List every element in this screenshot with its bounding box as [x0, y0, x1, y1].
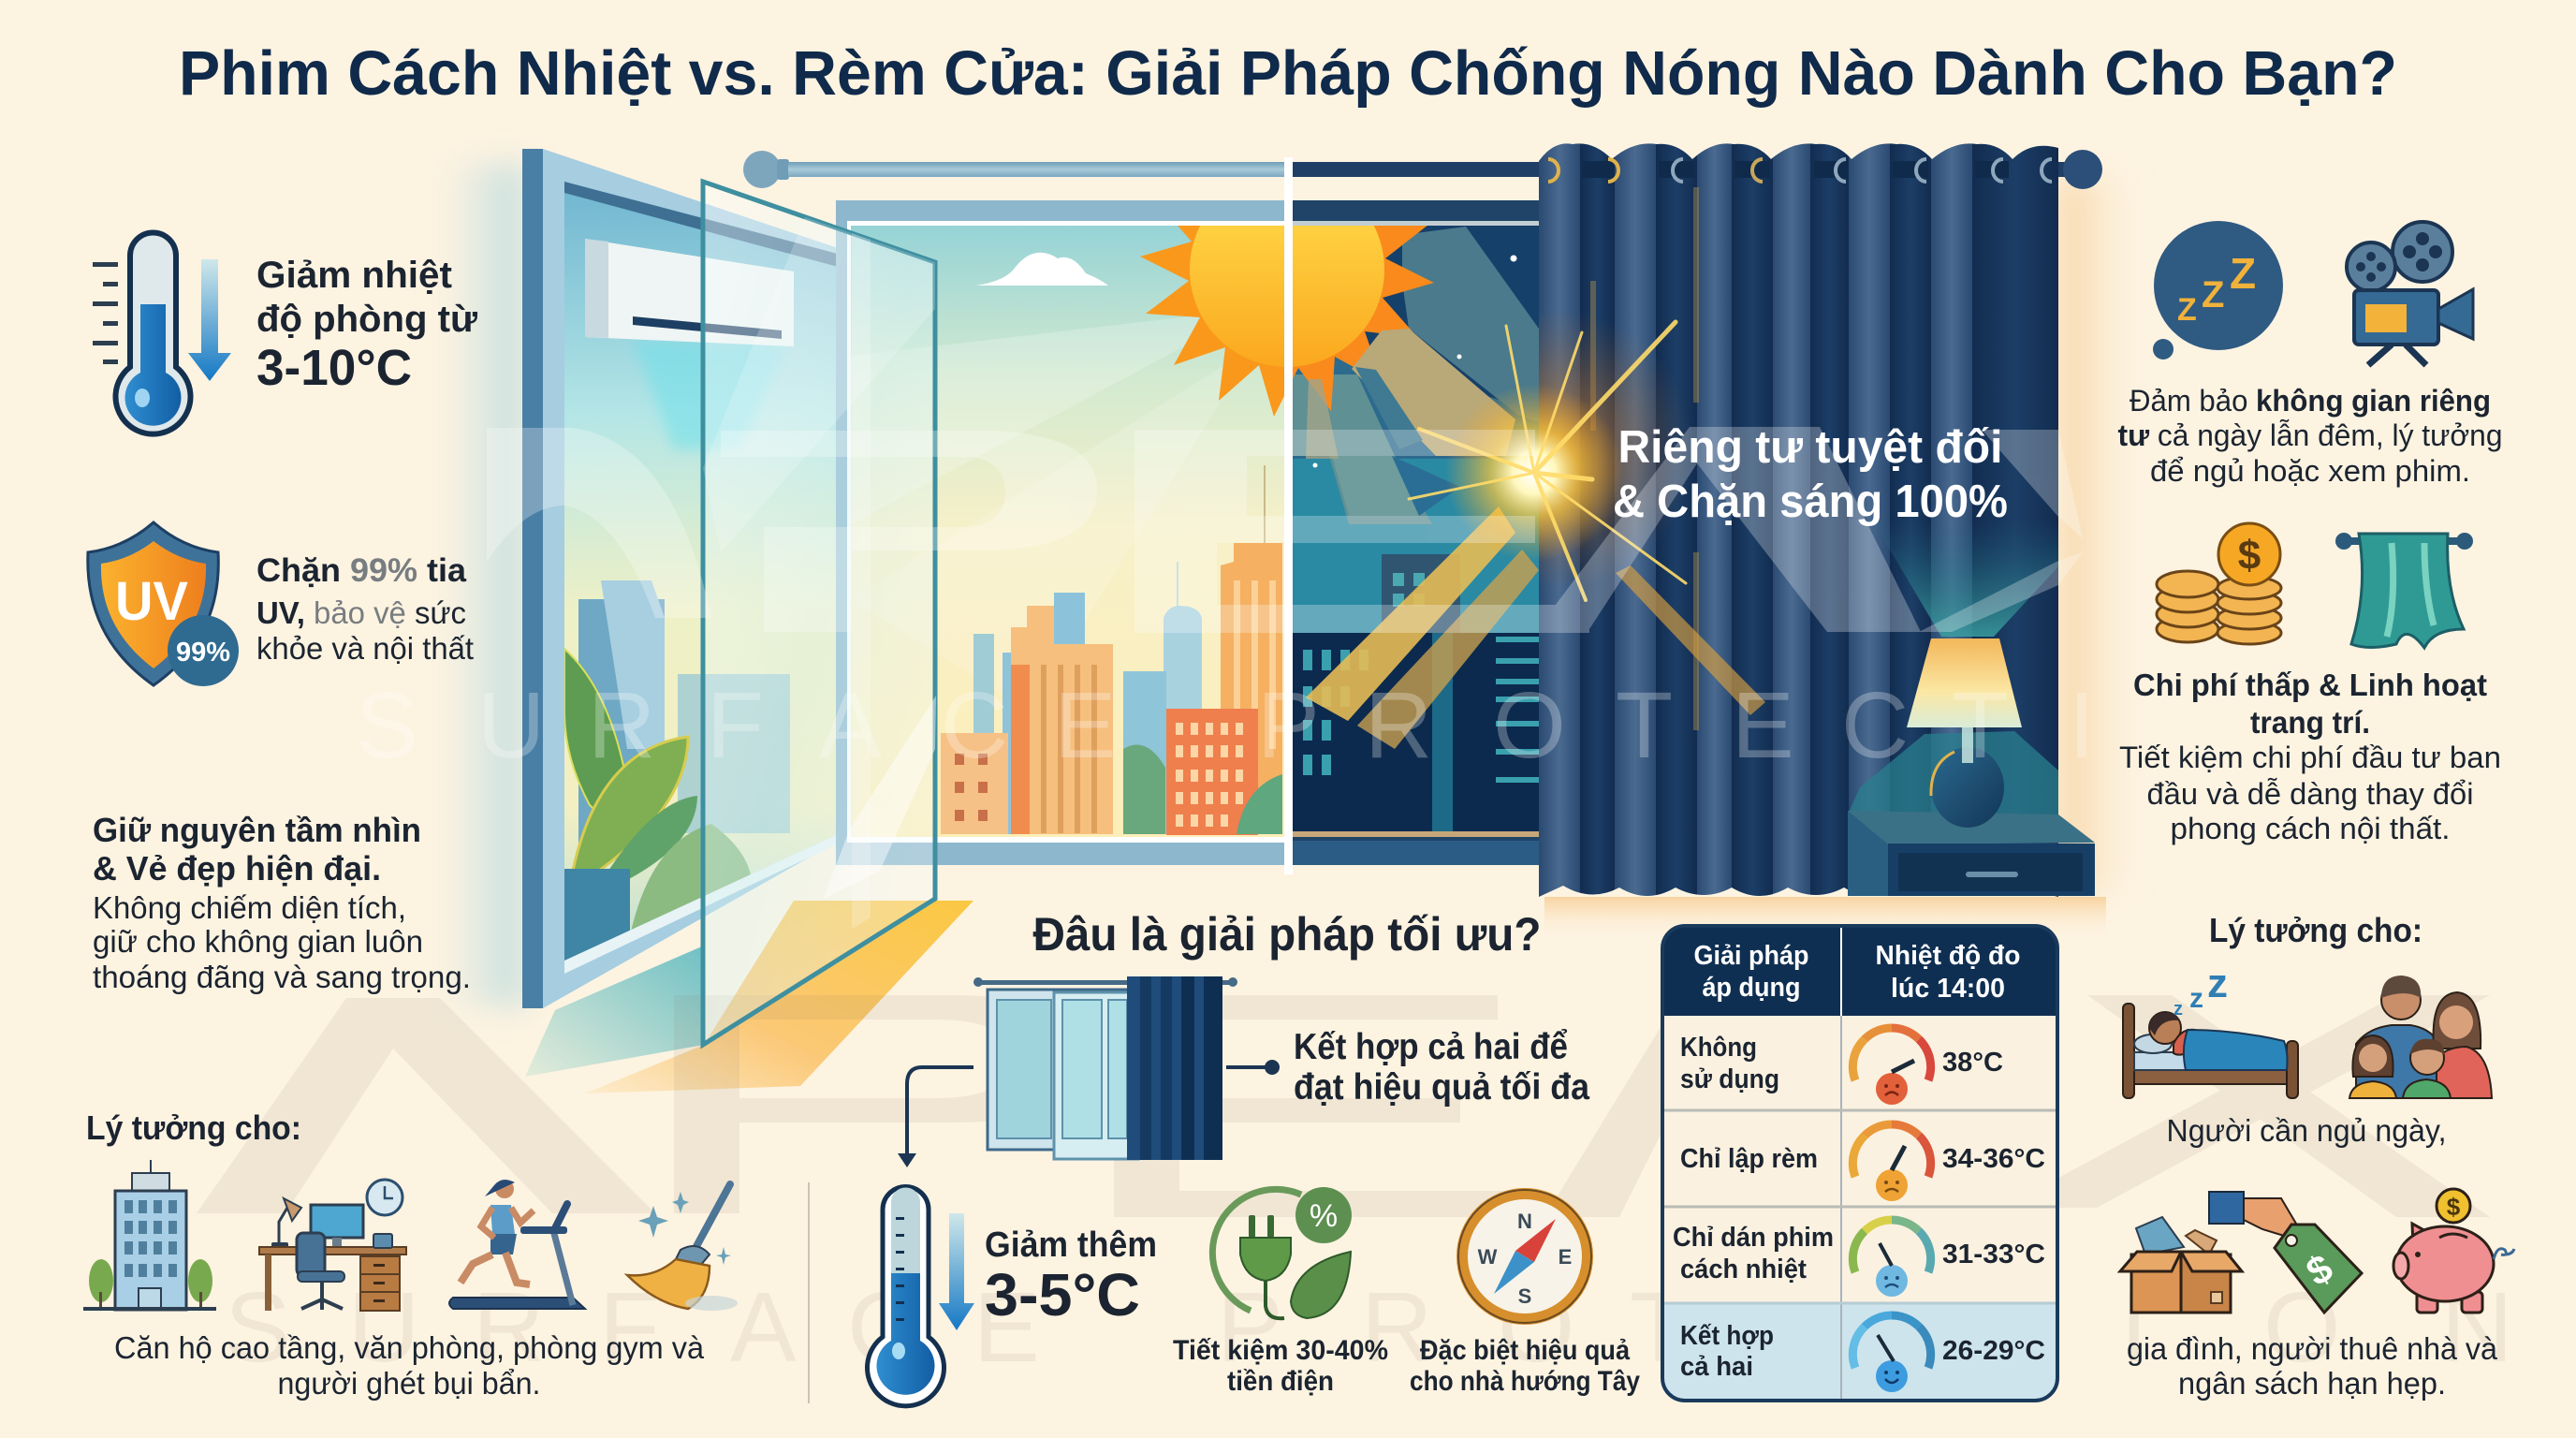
- icon: sleeping person: [2123, 961, 2298, 1098]
- callout: combine both: [1294, 1027, 1589, 1108]
- benefit: room temperature reduction: [93, 232, 477, 434]
- lamp light below shade: [1848, 731, 2058, 814]
- icon: UV shield: UV: [115, 571, 188, 632]
- row: combined 26-29°C: 26-29°C: [1942, 1336, 2045, 1366]
- text: day sleepers: Người cần ngủ ngày,: [2166, 1113, 2447, 1148]
- text: clear view and modern look: & Vẻ đẹp hiện đại.: [93, 849, 381, 888]
- icon: sleeping person: z: [2207, 961, 2228, 1006]
- text: temperature: [256, 255, 477, 396]
- row: no solution 38°C: sử dụng: [1680, 1064, 1779, 1094]
- row: film only 31-33°C: Chỉ dán phim: [1673, 1223, 1834, 1253]
- icon: moving box: [2120, 1217, 2242, 1313]
- icon: hand with price tag: [2209, 1192, 2362, 1313]
- row: curtain only 34-36°C: 34-36°C: [1942, 1144, 2045, 1174]
- icon: compass: [1458, 1190, 1591, 1323]
- row: no solution 38°C: 38°C: [1942, 1048, 2003, 1078]
- row: film only 31-33°C: 31-33°C: [1942, 1240, 2045, 1269]
- floor light patches: [525, 901, 973, 1093]
- bottom-left divider: [808, 1182, 810, 1403]
- text: west-facing homes: cho nhà hướng Tây: [1410, 1366, 1640, 1397]
- benefit: UV protection: [88, 522, 474, 686]
- caption: [114, 1330, 705, 1401]
- icon: treadmill runner: [449, 1180, 585, 1309]
- text: west-facing homes: [1410, 1335, 1640, 1397]
- grommets: [1548, 159, 2052, 182]
- text: families and renters: gia đình, người thuê nhà và: [2127, 1331, 2498, 1366]
- center window: day side: [836, 200, 1284, 865]
- window film glass pane: [703, 182, 936, 1045]
- heading: Lý tưởng cho:: [86, 1108, 301, 1147]
- text: energy saving: tiền điện: [1227, 1366, 1334, 1397]
- text: cost: [2119, 668, 2501, 845]
- text: cost: Tiết kiệm chi phí đầu tư ban: [2119, 741, 2501, 774]
- row: curtain only 34-36°C: [1680, 1124, 2045, 1201]
- icon: sleep bubble: [2153, 221, 2283, 360]
- icon: sleeping person: z: [2174, 999, 2183, 1020]
- tan sun beam: [1352, 329, 1515, 456]
- cloud: [976, 253, 1108, 286]
- icon: down arrow: [188, 259, 231, 381]
- text: clear view and modern look: giữ cho không gian luôn: [93, 924, 423, 959]
- table header: [1694, 941, 2020, 1004]
- city skyline: [973, 634, 994, 733]
- text: energy saving: [1173, 1335, 1388, 1397]
- icon: coins: [2157, 523, 2281, 644]
- lamp light above shade: [1889, 536, 2058, 637]
- glare starburst: [1409, 322, 1686, 600]
- text: clear view and modern look: Không chiếm diện tích,: [93, 890, 406, 925]
- icon: hanging drape: [2335, 533, 2473, 648]
- table header: lúc 14:00: [1891, 974, 2005, 1004]
- icon: UV shield: [88, 522, 239, 686]
- icon: apartment tower: [83, 1160, 216, 1311]
- gold beam: [1306, 506, 1515, 721]
- rod visible between pleats: [1582, 161, 2009, 178]
- panel: cost benefit: [2119, 523, 2501, 845]
- row: film only 31-33°C: cách nhiệt: [1680, 1255, 1807, 1284]
- text: further reduction: Giảm thêm: [985, 1225, 1157, 1265]
- wall tints: [440, 164, 2133, 1006]
- watermark: white logo over scene: SURFACEPROTECTI: [356, 673, 2095, 778]
- light rays: [938, 316, 1200, 477]
- text: cost: phong cách nội thất.: [2170, 812, 2451, 845]
- text: cost: trang trí.: [2250, 705, 2370, 740]
- text: privacy: [2117, 384, 2503, 488]
- row: no solution 38°C: Không: [1680, 1033, 1757, 1063]
- curtain overlay text: [1613, 422, 2008, 527]
- icon: sleeping person: z: [2189, 983, 2203, 1014]
- stars: [1312, 255, 1516, 468]
- icon: eco plug: %: [1310, 1198, 1338, 1234]
- text: further reduction: [985, 1225, 1157, 1328]
- row: combined 26-29°C: cả hai: [1680, 1352, 1753, 1382]
- text: clear view and modern look: [93, 811, 471, 994]
- curtain overlay text: Riêng tư tuyệt đối: [1617, 422, 2003, 473]
- curtain glow: [1539, 322, 1683, 577]
- icon: office desk: [259, 1180, 406, 1311]
- icon: sleep bubble: Z: [2177, 292, 2197, 328]
- distant buildings through window: [578, 580, 790, 843]
- table header: Giải pháp: [1694, 941, 1808, 971]
- text: temperature: độ phòng từ: [256, 299, 477, 340]
- text: UV: khỏe và nội thất: [256, 631, 474, 666]
- table lamp and nightstand: [1848, 638, 2095, 896]
- text: west-facing homes: Đặc biệt hiệu quả: [1420, 1335, 1630, 1366]
- text: temperature: 3-10°C: [256, 340, 412, 396]
- text: UV: [256, 552, 474, 666]
- left window: interior wall frame: [522, 149, 852, 1008]
- panel: film ideal for: [83, 1108, 738, 1401]
- gold light edges: [1593, 187, 1696, 730]
- text: cost: Chi phí thấp & Linh hoạt: [2133, 668, 2487, 702]
- arrow: down to thermometer: [898, 1067, 973, 1167]
- curtain rod: [743, 150, 2102, 189]
- text: clear view and modern look: thoáng đãng và sang trọng.: [93, 960, 471, 994]
- text: UV: Chặn 99% tia: [256, 552, 467, 589]
- icon: window with film and curtain: [973, 976, 1237, 1160]
- text: energy saving: Tiết kiệm 30-40%: [1173, 1335, 1388, 1366]
- icon: eco plug: [1212, 1187, 1352, 1318]
- row: no solution 38°C: [1680, 1028, 2003, 1105]
- text: UV: UV, bảo vệ sức: [256, 595, 466, 630]
- icon: family: [2349, 976, 2492, 1098]
- panel: privacy benefit: [2117, 221, 2503, 488]
- heading: Đâu là giải pháp tối ưu?: [1033, 908, 1541, 961]
- table header: áp dụng: [1702, 973, 1801, 1003]
- central divider: [1284, 157, 1293, 874]
- panel: optimal solution: [867, 908, 1640, 1406]
- connector to text: [1226, 1060, 1280, 1075]
- title: Phim Cách Nhiệt vs. Rèm Cửa: Giải Pháp Chống Nóng Nào Dành Cho Bạn?: [179, 38, 2397, 109]
- row: combined 26-29°C: [1680, 1315, 2045, 1392]
- icon: thermometer: [93, 232, 191, 434]
- icon: movie camera: [2347, 222, 2473, 365]
- blackout curtain: [1539, 143, 2058, 897]
- row: film only 31-33°C: [1673, 1220, 2045, 1297]
- text: clear view and modern look: Giữ nguyên tầm nhìn: [93, 811, 421, 849]
- text: privacy: tư cả ngày lẫn đêm, lý tưởng: [2117, 418, 2503, 452]
- watermark: white logo over scene: [356, 427, 2095, 778]
- cold air stream: [633, 339, 786, 449]
- icon: compass: S: [1518, 1284, 1531, 1308]
- text: further reduction: 3-5°C: [985, 1261, 1140, 1328]
- plant: [564, 649, 753, 961]
- icon: sleep bubble: Z: [2202, 274, 2224, 315]
- text: privacy: Đảm bảo không gian riêng: [2130, 384, 2491, 418]
- watermark: brown logo on background: [197, 995, 2513, 1383]
- table header: Nhiệt độ đo: [1876, 941, 2020, 971]
- row: curtain only 34-36°C: Chỉ lập rèm: [1680, 1144, 1818, 1174]
- text: privacy: để ngủ hoặc xem phim.: [2150, 454, 2470, 488]
- AC unit: [585, 239, 794, 346]
- caption: người ghét bụi bẩn.: [277, 1366, 541, 1401]
- icon: thermometer: [867, 1187, 944, 1406]
- icon: down arrow: [939, 1213, 974, 1330]
- callout: combine both: Kết hợp cả hai để: [1294, 1027, 1568, 1067]
- center window: night side: [1293, 200, 1539, 865]
- icon: broom: [627, 1184, 738, 1311]
- row: combined 26-29°C: Kết hợp: [1680, 1321, 1774, 1351]
- text: families and renters: ngân sách hạn hẹp.: [2178, 1366, 2446, 1401]
- text: families and renters: [2127, 1331, 2498, 1401]
- icon: coins: $: [2238, 533, 2261, 579]
- comparison table: [1662, 926, 2057, 1401]
- text: cost: đầu và dễ dàng thay đổi: [2147, 777, 2473, 811]
- icon: sleep bubble: Z: [2230, 249, 2256, 298]
- night sun: [1293, 226, 1434, 411]
- icon: piggy bank: $: [2447, 1193, 2461, 1221]
- dark buildings: [1382, 554, 1460, 638]
- sky bands: [1293, 456, 1539, 634]
- callout: combine both: đạt hiệu quả tối đa: [1294, 1067, 1589, 1108]
- caption: Căn hộ cao tầng, văn phòng, phòng gym và: [114, 1330, 705, 1365]
- watermark: brown logo on background: SURFACEPROTECTION: [225, 1272, 2513, 1383]
- icon: piggy bank: [2393, 1189, 2514, 1313]
- sun: [1140, 226, 1284, 417]
- icon: UV shield: 99%: [176, 638, 230, 668]
- panel: curtain ideal for: [2120, 911, 2514, 1401]
- icon: compass: N: [1517, 1210, 1532, 1233]
- heading: Lý tưởng cho:: [2209, 911, 2422, 949]
- text: temperature: Giảm nhiệt: [256, 255, 452, 296]
- icon: compass: W: [1478, 1245, 1498, 1269]
- icon: compass: E: [1559, 1245, 1572, 1269]
- curtain overlay text: & Chặn sáng 100%: [1613, 477, 2008, 527]
- icon: hand with price tag: $: [2299, 1245, 2340, 1294]
